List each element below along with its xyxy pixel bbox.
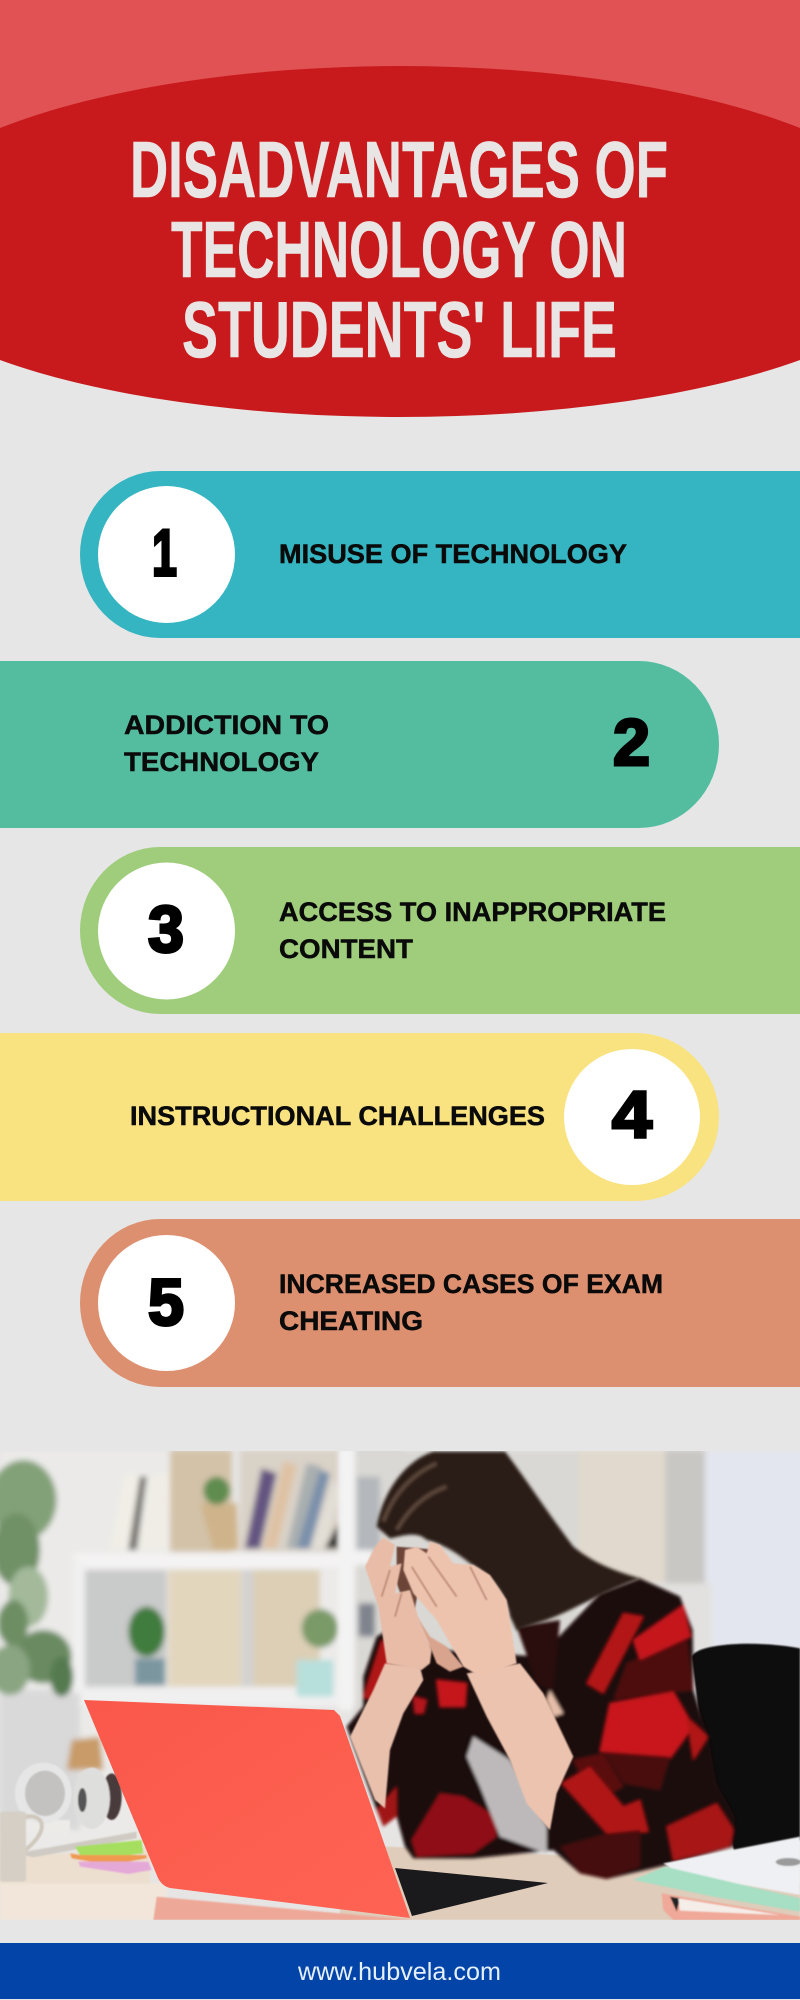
background wall right [340,1450,800,1717]
laptop [84,1700,548,1918]
hair highlights [383,1463,447,1530]
panel: item 1 misuse of technology: 1 [152,516,177,590]
panel: item 2 addiction to technology: ADDICTION TO [124,710,329,740]
header band [0,0,800,135]
panel: item 3 access to inappropriate content [80,847,800,1014]
hands [365,1537,517,1677]
panel: item 2 addiction to technology: 2 [613,705,650,779]
footer bar [0,1943,800,1999]
panel: item 2 addiction to technology [0,661,719,828]
title [130,125,668,374]
face shadow [396,1546,429,1609]
panel: item 1 misuse of technology: MISUSE OF TECHNOLOGY [279,539,627,569]
panel: item 5 increased cases of exam cheating [80,1219,800,1387]
chair [692,1644,800,1853]
panel: item 5 increased cases of exam cheating: 5 [148,1265,184,1339]
panel: item 4 instructional challenges [0,1033,719,1201]
shirt [347,1578,735,1879]
panel: item 2 addiction to technology: TECHNOLOGY [124,747,319,777]
desk [340,1847,800,1920]
hair [377,1452,640,1630]
panel: item 3 access to inappropriate content: 3 [148,892,184,966]
books right [633,1837,800,1920]
photo: stressed student at laptop [0,1450,800,1920]
panel: item 1 misuse of technology [80,471,800,638]
panel: item 5 increased cases of exam cheating: INCREASED CASES OF EXAM [279,1269,663,1299]
desk items left [0,1763,413,1920]
chin [418,1618,464,1672]
panel: item 4 instructional challenges: 4 [612,1077,652,1151]
panel: item 4 instructional challenges: INSTRUCTIONAL CHALLENGES [130,1101,545,1131]
arms [350,1663,573,1830]
panel: item 5 increased cases of exam cheating: CHEATING [279,1306,423,1336]
header ellipse [0,66,800,417]
panel: item 3 access to inappropriate content: ACCESS TO INAPPROPRIATE [279,897,666,927]
footer url: www.hubvela.com [297,1958,501,1986]
panel: item 3 access to inappropriate content: CONTENT [279,934,414,964]
